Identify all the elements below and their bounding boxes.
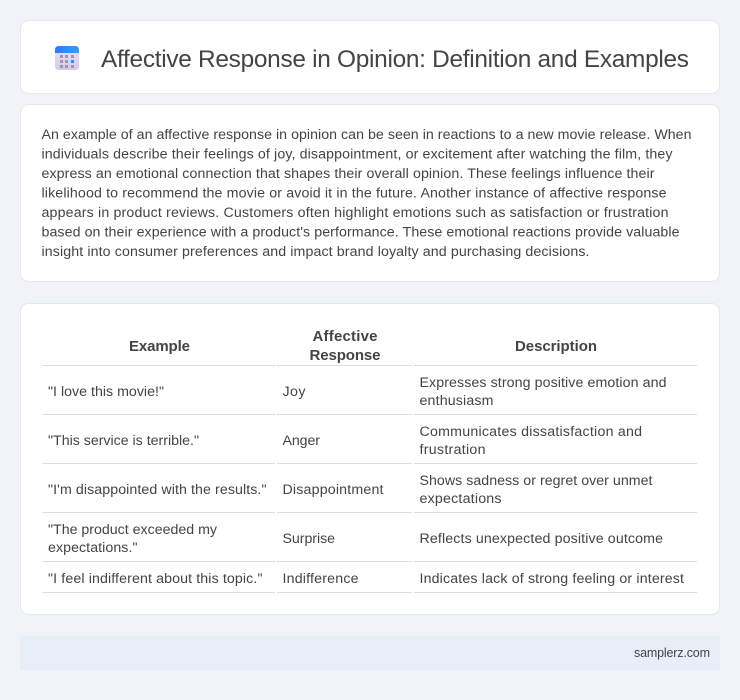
table row: indifference: Indifference	[282, 571, 359, 587]
table row: anger: Communicates dissatisfaction and	[420, 424, 642, 440]
text block: intro paragraph: express an emotional connection that shapes their overall opinion. These feelings influence their	[42, 166, 655, 182]
title: Affective Response in Opinion: Definition and Examples	[101, 46, 689, 73]
table row: surprise: Reflects unexpected positive outcome	[420, 531, 663, 547]
table row: surprise: Surprise	[282, 531, 335, 547]
table row: joy: Expresses strong positive emotion and	[420, 375, 666, 391]
table row: disappointment: Disappointment	[282, 482, 384, 498]
text block: intro paragraph	[42, 127, 692, 260]
table row: disappointment: "I'm disappointed with the results."	[48, 482, 266, 498]
text block: intro paragraph: likelihood to recommend the movie or avoid it in the future. Another instance of affective response	[42, 186, 667, 202]
table row: disappointment	[48, 473, 653, 507]
table header row: Affective	[312, 328, 378, 345]
table row: anger: frustration	[420, 442, 486, 458]
text block: intro paragraph: An example of an affective response in opinion can be seen in reactions to a new movie release. When	[42, 127, 692, 143]
footer	[20, 636, 720, 670]
table row: disappointment: Shows sadness or regret over unmet	[420, 473, 653, 489]
table header row: Description	[515, 338, 597, 355]
text block: intro paragraph: appears in product reviews. Customers often highlight emotions such as satisfaction or frustration	[42, 205, 668, 221]
panel: title header	[20, 20, 720, 94]
table row: anger: Anger	[282, 433, 320, 449]
table row: joy: Joy	[282, 384, 306, 400]
table row: disappointment: expectations	[420, 491, 502, 507]
table header row	[129, 328, 597, 364]
table row: indifference: Indicates lack of strong feeling or interest	[420, 571, 684, 587]
table grid lines	[43, 366, 697, 592]
table row: surprise	[48, 522, 663, 556]
table row: joy: enthusiasm	[420, 393, 494, 409]
text block: intro paragraph: insight into consumer preferences and impact brand loyalty and purchasing decisions.	[42, 244, 590, 260]
icon: calendar	[55, 46, 79, 70]
table row: joy	[48, 375, 666, 409]
panel: description	[20, 104, 720, 282]
table row: joy: "I love this movie!"	[48, 384, 164, 400]
text block: intro paragraph: individuals describe their feelings of joy, disappointment, or excitement after watching the film, they	[42, 146, 673, 162]
panel: examples table	[20, 304, 720, 614]
footer credit: samplerz.com	[634, 646, 710, 660]
table row: indifference	[48, 571, 684, 587]
table row: surprise: "The product exceeded my	[48, 522, 218, 538]
table row: indifference: "I feel indifferent about this topic."	[48, 571, 262, 587]
table row: anger: "This service is terrible."	[48, 433, 199, 449]
table header row: Response	[310, 347, 380, 364]
table row: anger	[48, 424, 642, 458]
text block: intro paragraph: based on their experience with a product's performance. These emotional reactions provide valuable	[42, 224, 680, 240]
table row: surprise: expectations."	[48, 540, 138, 556]
table header row: Example	[129, 338, 190, 355]
